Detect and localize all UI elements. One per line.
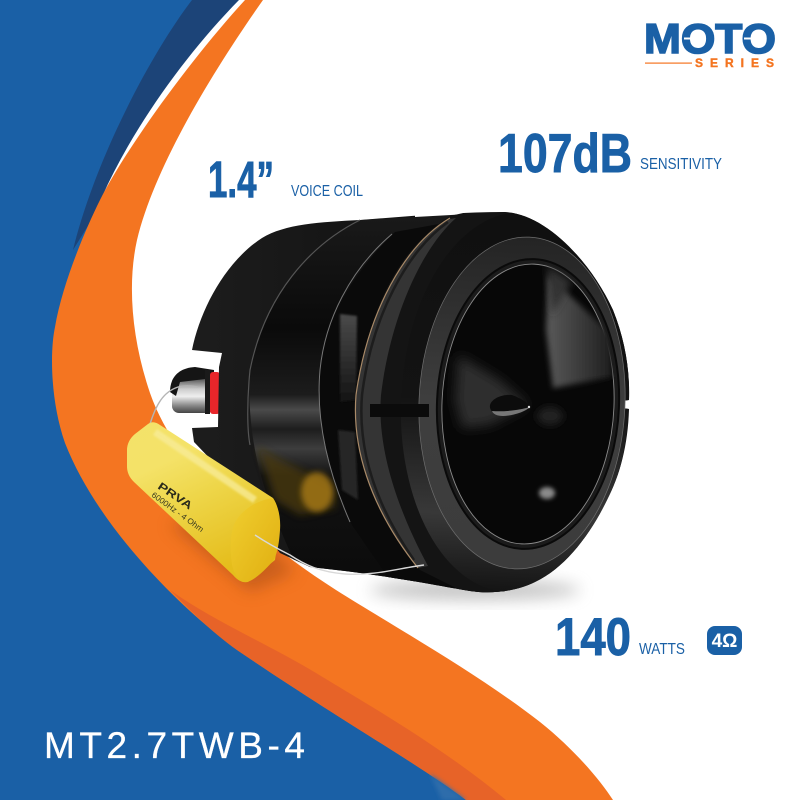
terminal cap (170, 367, 214, 396)
spec: sensitivity: SENSITIVITY (640, 156, 722, 173)
capacitor rating: 6000Hz - 4 Ohm (150, 490, 206, 534)
capacitor brand: PRVA (155, 481, 194, 512)
wire to terminal (150, 386, 198, 424)
phase plug (490, 395, 530, 416)
glossy mid band (249, 212, 505, 600)
capacitor highlight (155, 432, 255, 500)
background: dark orange ribbon (170, 590, 506, 800)
terminal red collar (210, 372, 220, 414)
badge: impedance: 4Ω (712, 631, 737, 652)
background: dark blue swoosh (73, 0, 239, 250)
badge: impedance (707, 626, 742, 655)
spec: voice coil: VOICE COIL (291, 183, 363, 200)
logo wordmark: MOTO (644, 15, 776, 62)
capacitor body (127, 422, 280, 582)
model number: MT2.7TWB-4 (44, 725, 305, 766)
wire from capacitor (255, 535, 424, 574)
speaker body (185, 200, 640, 605)
horn (436, 260, 620, 548)
capacitor reflection (258, 447, 335, 515)
spec: power: 140 (555, 608, 631, 667)
shadow under speaker (370, 580, 580, 600)
logo subtitle: SERIES (695, 56, 774, 70)
shadow under capacitor (170, 505, 295, 592)
spec: voice coil: 1.4” (208, 151, 274, 208)
second band seam (319, 234, 392, 522)
background: orange swoosh (52, 0, 613, 800)
spec: sensitivity: 107dB (498, 122, 632, 184)
logo orange rule (645, 62, 692, 64)
capacitor (127, 422, 280, 582)
gold rim line (355, 218, 450, 568)
horn lip (431, 255, 625, 553)
background: bottom light blue glint (430, 774, 466, 800)
front bezel (393, 207, 637, 597)
dark gasket groove (361, 222, 448, 560)
rear textured housing (192, 216, 415, 582)
grey trim ring (412, 233, 632, 573)
bezel slot (370, 404, 429, 417)
spec: power: WATTS (639, 641, 685, 658)
horn reflections (455, 265, 612, 499)
terminal post (170, 367, 220, 414)
brand logo: MOTO series (644, 15, 776, 70)
spec: power (555, 608, 685, 667)
front shell (378, 212, 630, 592)
side flat highlight (340, 314, 357, 402)
terminal chrome (172, 376, 214, 413)
rear band seam (248, 220, 360, 445)
grainy gasket and grey ring (355, 218, 456, 568)
second band (319, 212, 505, 600)
spec: voice coil (208, 151, 363, 208)
capacitor end cap (231, 498, 280, 582)
lower flat highlight (338, 430, 358, 500)
